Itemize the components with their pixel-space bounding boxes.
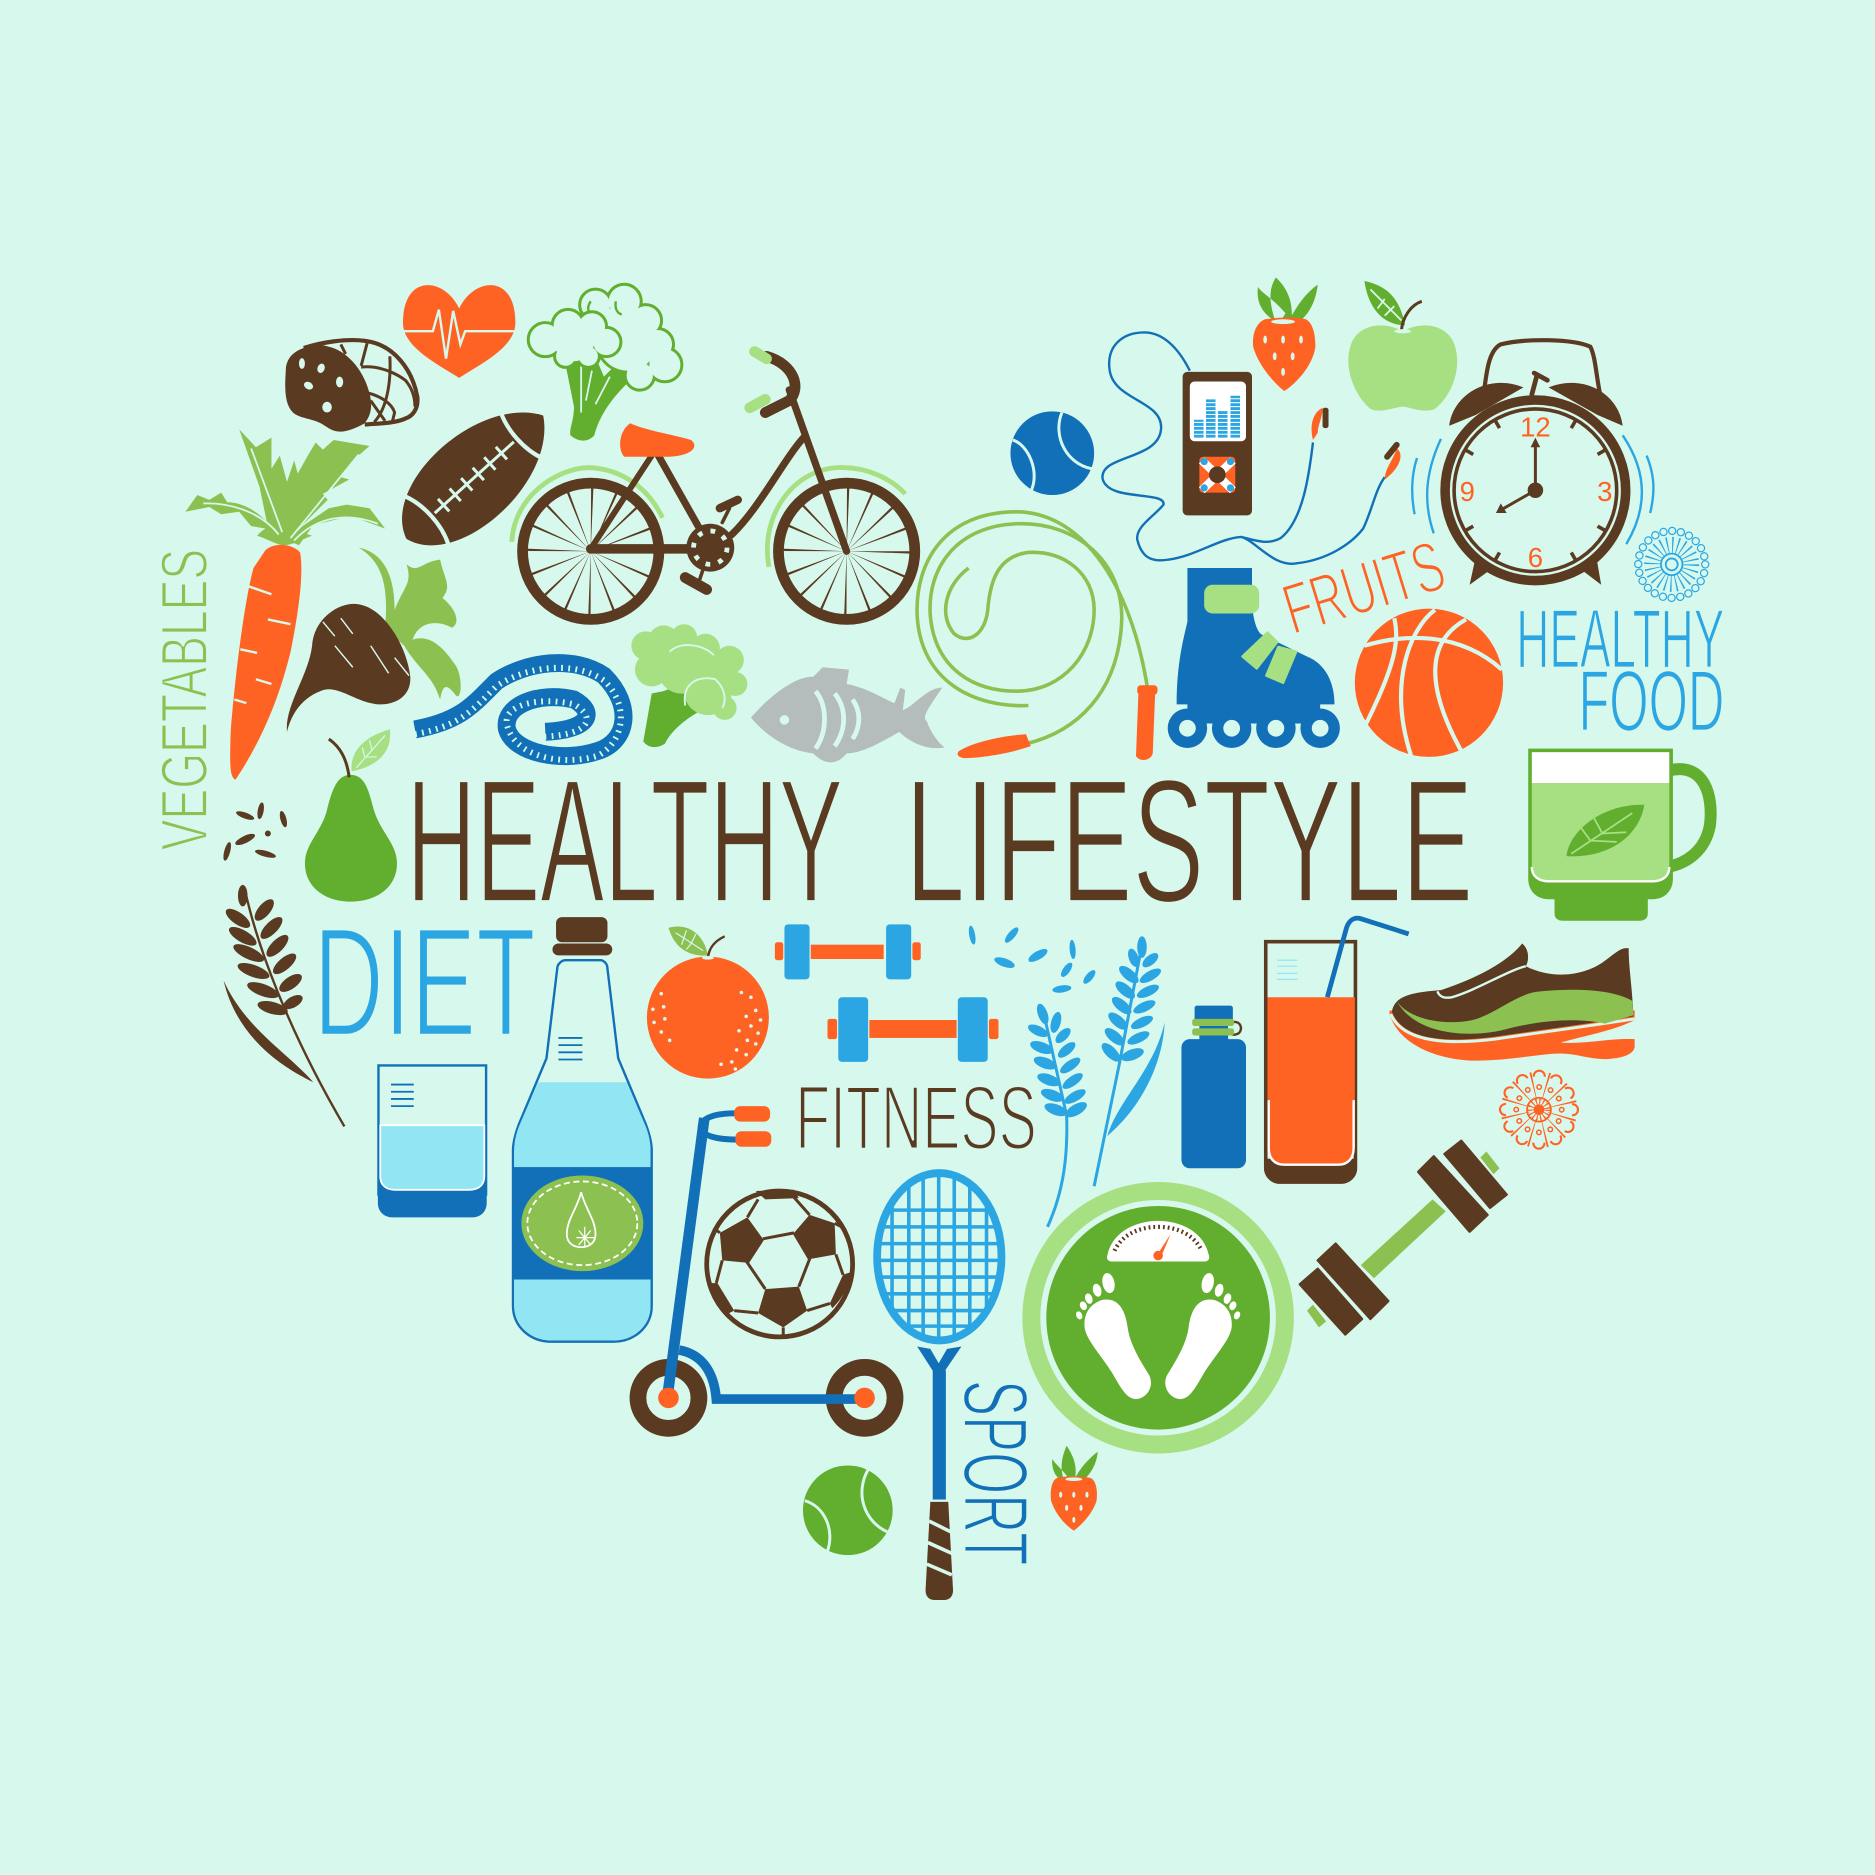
icon: tennis racket (877, 1173, 1001, 1600)
icon: roller skate (1168, 568, 1340, 748)
clock numbers: 6 (1528, 542, 1543, 573)
icon: seeds (222, 802, 288, 861)
icon: water glass (378, 1065, 487, 1217)
icon: music player with earphones (1102, 332, 1401, 564)
icon: bicycle (512, 352, 915, 619)
icon: running shoe (1390, 943, 1635, 1061)
clock ticks (1465, 420, 1606, 561)
icon: orange (647, 927, 769, 1079)
label: healthy food (1516, 591, 1724, 750)
right stalk (1094, 936, 1165, 1186)
icon: green apple (1348, 281, 1457, 411)
icon: heart with pulse (403, 285, 515, 378)
bicycle seat (620, 423, 694, 457)
icon: strawberry (1253, 277, 1318, 391)
clock numbers: 9 (1460, 476, 1475, 507)
icon: blue tennis ball (1010, 411, 1094, 495)
earbuds (1312, 408, 1401, 480)
icon: light green broccoli (631, 624, 747, 747)
clock hands (1502, 445, 1535, 509)
bicycle fenders (512, 468, 905, 567)
icon: bread in net (285, 340, 417, 432)
left foot (1075, 1272, 1151, 1399)
icon: blue wheat stalks (1026, 936, 1165, 1227)
icon: herbal tea cup (1528, 749, 1711, 921)
icon: jump rope (917, 512, 1158, 760)
icon: diagonal dumbbell (1300, 1141, 1507, 1335)
icon: pear (305, 729, 397, 902)
scale dial (1107, 1221, 1209, 1262)
icon: blue sports bottle (1181, 1006, 1246, 1168)
icon: blue seeds (968, 925, 1097, 994)
clock handle and bells (1483, 340, 1602, 404)
label: fitness: FITNESS (795, 1068, 1037, 1169)
title: healthy lifestyle: HEALTHY (407, 744, 843, 940)
clock numbers (1460, 411, 1612, 573)
clock face (1445, 400, 1626, 581)
label: healthy food: FOOD (1578, 654, 1724, 750)
clock numbers: 3 (1597, 476, 1612, 507)
icon: soccer ball (707, 1190, 853, 1337)
icon: american football (377, 383, 573, 571)
player body (1183, 372, 1252, 515)
icon: tape measure (415, 663, 624, 760)
player control pad (1199, 457, 1235, 493)
icon: alarm clock (1412, 340, 1653, 585)
icon: juice glass with straw (1264, 918, 1409, 1184)
right foot (1165, 1272, 1242, 1399)
icon: water bottle (513, 917, 652, 1342)
label: fruits: FRUITS (1274, 526, 1454, 650)
bicycle wheels (523, 483, 915, 619)
icon: brown wheat (223, 885, 344, 1126)
icon: basketball (1355, 609, 1503, 757)
bicycle handlebar grips (750, 352, 767, 408)
left stalk (1026, 1002, 1089, 1227)
bicycle frame (591, 356, 847, 580)
label: vegetables: VEGETABLES (147, 549, 221, 850)
icon: large dumbbell (827, 997, 998, 1062)
icon: bathroom scale (1031, 1191, 1285, 1445)
equalizer bars (1199, 396, 1235, 438)
icon: blue flower (1638, 531, 1705, 598)
vibration arcs (1412, 435, 1653, 544)
icon: carrot (185, 429, 385, 780)
icon: beet (287, 548, 461, 732)
clock numbers: 12 (1520, 411, 1551, 442)
title: healthy lifestyle: LIFESTYLE (905, 744, 1473, 940)
icon: scooter (638, 1106, 895, 1428)
earphone wire (1102, 332, 1385, 564)
icon: small dumbbell (775, 924, 921, 979)
icon: small strawberry (1051, 1446, 1098, 1531)
icon: fish (751, 667, 945, 762)
icon: green tennis ball (803, 1465, 893, 1555)
icon: orange flower (1506, 1076, 1572, 1143)
icon: broccoli outline (529, 285, 682, 441)
label: diet: DIET (313, 895, 536, 1069)
label: sport: SPORT (944, 1380, 1047, 1565)
